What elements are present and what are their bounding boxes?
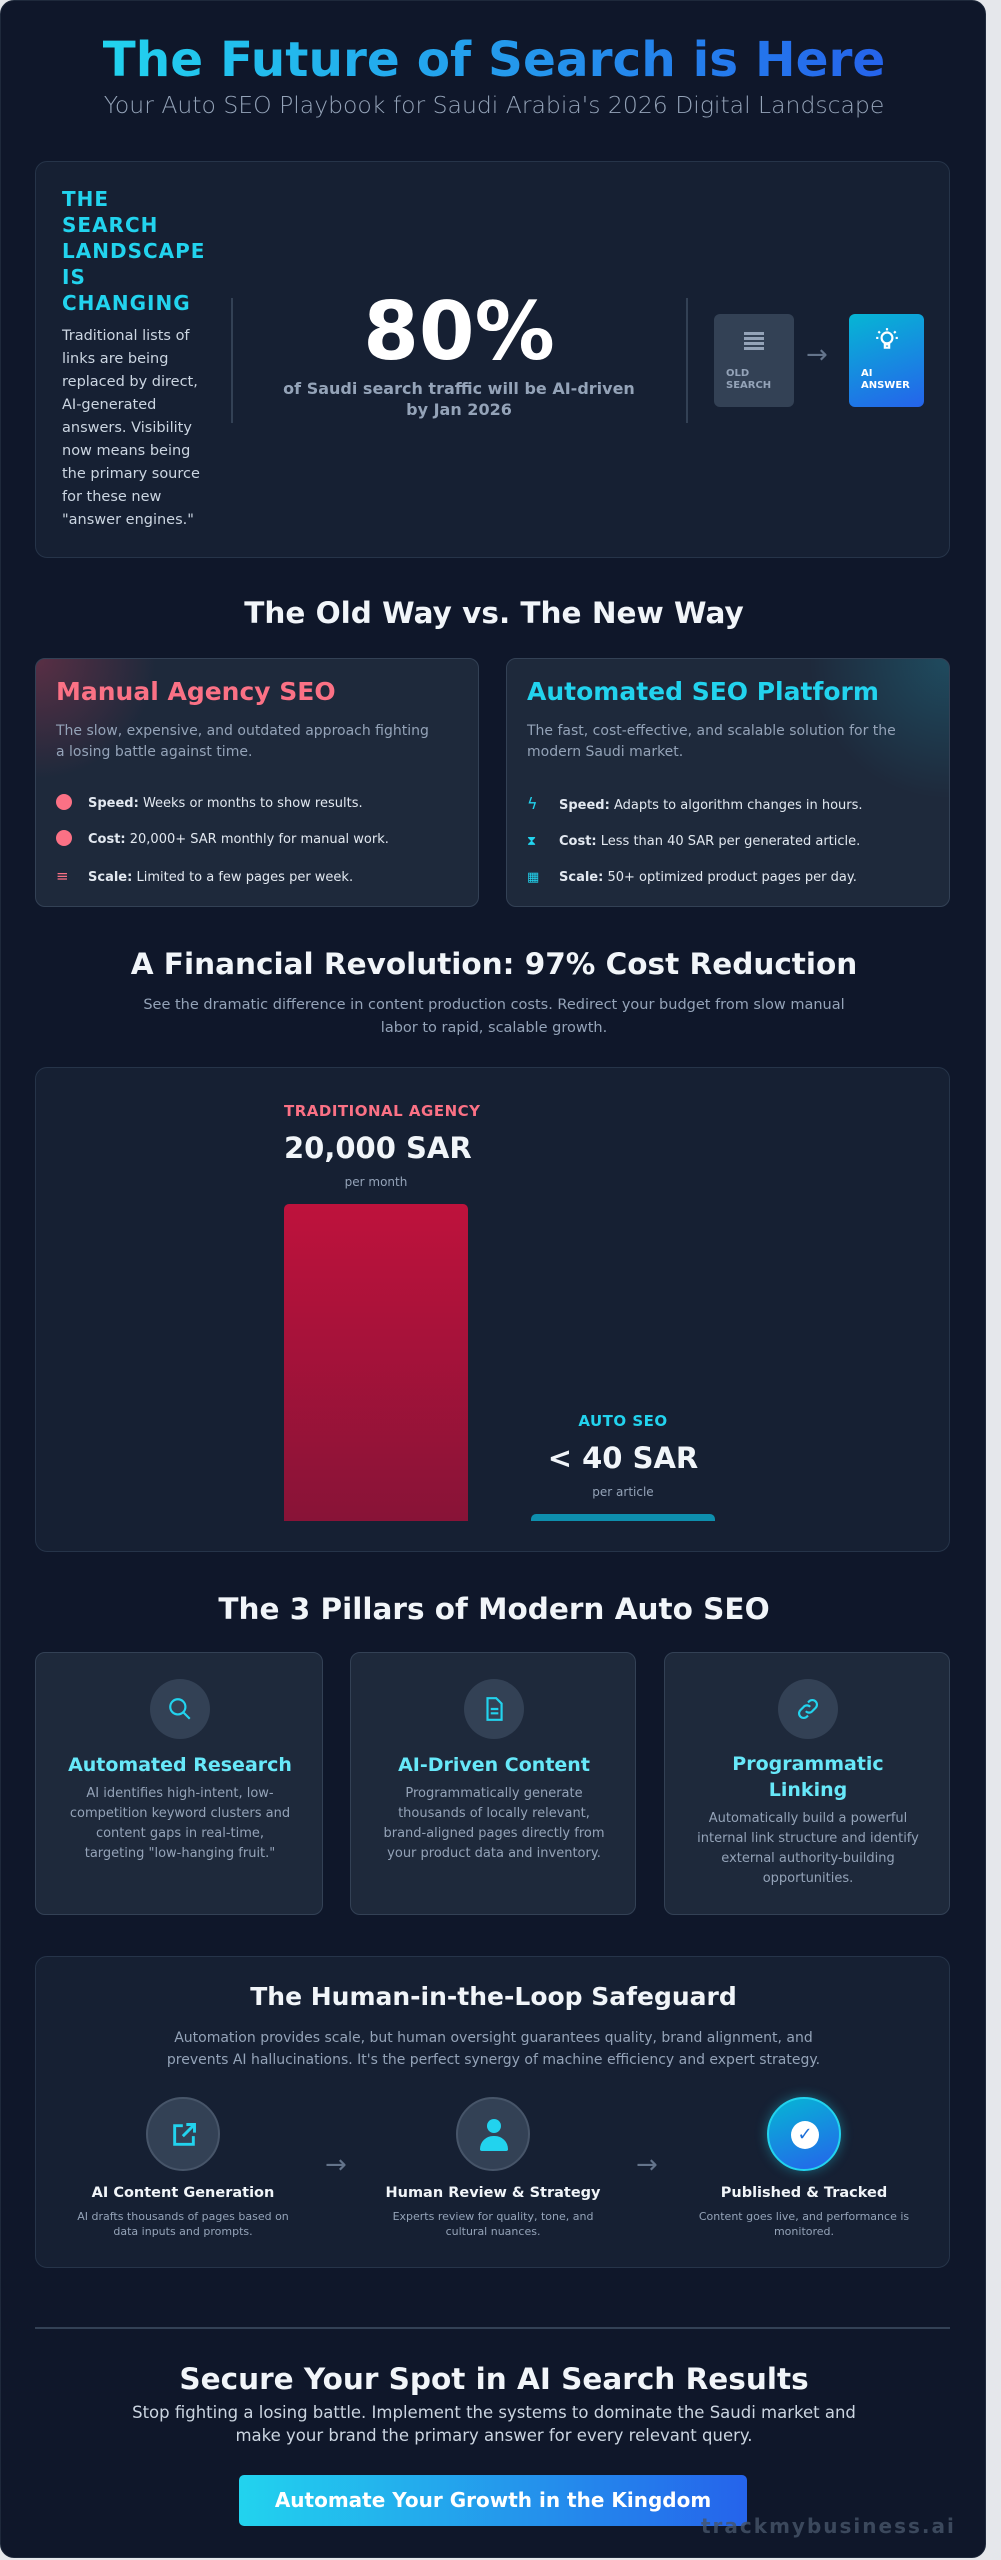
- cta description: Stop fighting a losing battle. Implement the systems to dominate the Saudi market and: [132, 2403, 856, 2422]
- icon: AI answer: [849, 314, 924, 407]
- heading: search landscape changing: IS: [62, 265, 86, 289]
- text: AI-Driven Content: [398, 1754, 590, 1776]
- button: [239, 2475, 747, 2526]
- body text: for these new: [62, 489, 161, 505]
- title: Automated SEO Platform: [527, 677, 879, 706]
- text: targeting "low-hanging fruit.": [85, 1846, 275, 1861]
- heading: search landscape changing: CHANGING: [62, 291, 191, 315]
- text: [697, 1753, 919, 1886]
- icon: old search: OLD: [726, 368, 749, 379]
- heading: search landscape changing: [62, 187, 205, 315]
- step: published: Content goes live, and performance is: [699, 2210, 909, 2223]
- icon: old search: [714, 314, 794, 407]
- step: published: monitored.: [774, 2225, 834, 2238]
- text: Programmatic: [732, 1753, 884, 1775]
- step: published: ✓: [797, 2124, 813, 2145]
- financial description: See the dramatic difference in content production costs. Redirect your budget from slow manual: [143, 997, 845, 1013]
- panel: pillar linking: [664, 1652, 950, 1915]
- text: internal link structure and identify: [697, 1831, 919, 1846]
- description: [167, 2030, 820, 2068]
- arrow: →: [325, 2150, 347, 2180]
- description: The slow, expensive, and outdated approach fighting: [56, 723, 429, 739]
- step: published: Published & Tracked: [721, 2185, 887, 2201]
- list: Cost: 20,000+ SAR monthly for manual work.: [88, 832, 389, 847]
- panel: pillar research: [35, 1652, 323, 1915]
- arrow: →: [636, 2150, 658, 2180]
- list: [527, 794, 863, 885]
- list: Scale: 50+ optimized product pages per day.: [559, 870, 857, 885]
- button: Automate Your Growth in the Kingdom: [275, 2488, 711, 2512]
- icon: link: [778, 1679, 838, 1739]
- text: content gaps in real-time,: [96, 1826, 264, 1841]
- bar: auto seo: [548, 1412, 698, 1499]
- watermark: trackmybusiness.ai: [701, 2514, 956, 2538]
- description: [56, 723, 429, 760]
- panel: human in the loop: [35, 1956, 950, 2268]
- text: AI identifies high-intent, low-: [86, 1786, 274, 1801]
- panel: search landscape: [35, 161, 950, 558]
- icon: search: [150, 1679, 210, 1739]
- text: external authority-building: [721, 1851, 895, 1866]
- heading: old vs new: The Old Way vs. The New Way: [244, 596, 744, 630]
- icon: AI answer: ANSWER: [861, 380, 910, 391]
- text: competition keyword clusters and: [70, 1806, 290, 1821]
- step: human review: [385, 2097, 601, 2238]
- stat: 80%: of Saudi search traffic will be AI-driven: [283, 379, 635, 398]
- list: Scale: Limited to a few pages per week.: [88, 870, 353, 885]
- description: Automation provides scale, but human oversight guarantees quality, brand alignment, and: [174, 2030, 813, 2046]
- body text: the primary source: [62, 466, 200, 482]
- stat: 80%: [283, 285, 635, 419]
- step: ai generation: AI Content Generation: [92, 2185, 274, 2201]
- financial description: [143, 997, 845, 1036]
- step: ai generation: data inputs and prompts.: [113, 2225, 253, 2238]
- body text: answers. Visibility: [62, 420, 192, 436]
- list: ≡: [56, 867, 69, 885]
- icon: AI answer: AI: [861, 368, 872, 379]
- text: [383, 1754, 605, 1861]
- list: Speed: Adapts to algorithm changes in hours.: [559, 798, 863, 813]
- stat: 80%: 80%: [363, 285, 555, 378]
- body text: AI-generated: [62, 397, 156, 413]
- bar: traditional agency: [284, 1102, 481, 1189]
- heading: search landscape changing: THE: [62, 187, 109, 211]
- heading: call to action: Secure Your Spot in AI Search Results: [179, 2362, 809, 2396]
- step: human review: cultural nuances.: [446, 2225, 540, 2238]
- list: ⧗: [527, 834, 536, 849]
- list: Cost: Less than 40 SAR per generated article.: [559, 834, 860, 849]
- text: Linking: [769, 1779, 847, 1801]
- arrow: →: [806, 340, 828, 370]
- text: Programmatically generate: [405, 1786, 583, 1801]
- icon: document: [464, 1679, 524, 1739]
- description: a losing battle against time.: [56, 744, 252, 760]
- description: The fast, cost-effective, and scalable solution for the: [527, 723, 896, 739]
- stat: 80%: by Jan 2026: [406, 400, 512, 419]
- bar: traditional agency: 20,000 SAR: [284, 1131, 472, 1165]
- panel: automated platform: [506, 658, 950, 907]
- body text: "answer engines.": [62, 512, 194, 528]
- text: Automatically build a powerful: [709, 1811, 907, 1826]
- heading: search landscape changing: SEARCH: [62, 213, 158, 237]
- panel: manual agency: [35, 658, 479, 907]
- panel: bar chart: [35, 1067, 950, 1552]
- description: prevents AI hallucinations. It's the perfect synergy of machine efficiency and expert strategy.: [167, 2052, 820, 2068]
- list: Speed: Weeks or months to show results.: [88, 796, 363, 811]
- text: thousands of locally relevant,: [398, 1806, 590, 1821]
- icon: old search: SEARCH: [726, 380, 771, 391]
- step: ai generation: AI drafts thousands of pages based on: [77, 2210, 289, 2223]
- body text: replaced by direct,: [62, 374, 198, 390]
- description: modern Saudi market.: [527, 744, 683, 760]
- bar: auto seo: per article: [592, 1485, 654, 1499]
- text: [68, 1754, 292, 1861]
- text: brand-aligned pages directly from: [383, 1826, 605, 1841]
- financial description: labor to rapid, scalable growth.: [381, 1020, 607, 1036]
- body text: now means being: [62, 443, 190, 459]
- list: [56, 794, 389, 885]
- body text: links are being: [62, 351, 168, 367]
- text: opportunities.: [763, 1871, 853, 1886]
- step: published: [699, 2090, 909, 2238]
- cta description: make your brand the primary answer for every relevant query.: [235, 2426, 753, 2445]
- step: ai generation: [77, 2097, 289, 2238]
- panel: pillar content: [350, 1652, 636, 1915]
- step: human review: Human Review & Strategy: [385, 2185, 601, 2201]
- cta description: [132, 2403, 856, 2445]
- bar: auto seo: AUTO SEO: [578, 1412, 668, 1430]
- heading: search landscape changing: LANDSCAPE: [62, 239, 205, 263]
- text: your product data and inventory.: [387, 1846, 601, 1861]
- heading: The Human-in-the-Loop Safeguard: [250, 1982, 737, 2011]
- heading: financial revolution: A Financial Revolution: 97% Cost Reduction: [131, 947, 857, 981]
- title: The Future of Search is Here: [103, 32, 885, 88]
- list: ▦: [527, 870, 539, 885]
- list: ϟ: [527, 794, 538, 813]
- body text: Traditional lists of: [62, 328, 190, 344]
- title: Manual Agency SEO: [56, 677, 336, 706]
- bar: traditional agency: per month: [345, 1175, 407, 1189]
- heading: pillars: The 3 Pillars of Modern Auto SEO: [218, 1592, 770, 1626]
- description: [526, 723, 896, 760]
- body text: [62, 328, 200, 528]
- subtitle: Your Auto SEO Playbook for Saudi Arabia's 2026 Digital Landscape: [104, 91, 884, 119]
- bar: traditional agency: TRADITIONAL AGENCY: [284, 1102, 481, 1120]
- step: human review: Experts review for quality, tone, and: [393, 2210, 593, 2223]
- text: Automated Research: [68, 1754, 292, 1776]
- bar: auto seo: < 40 SAR: [548, 1441, 698, 1475]
